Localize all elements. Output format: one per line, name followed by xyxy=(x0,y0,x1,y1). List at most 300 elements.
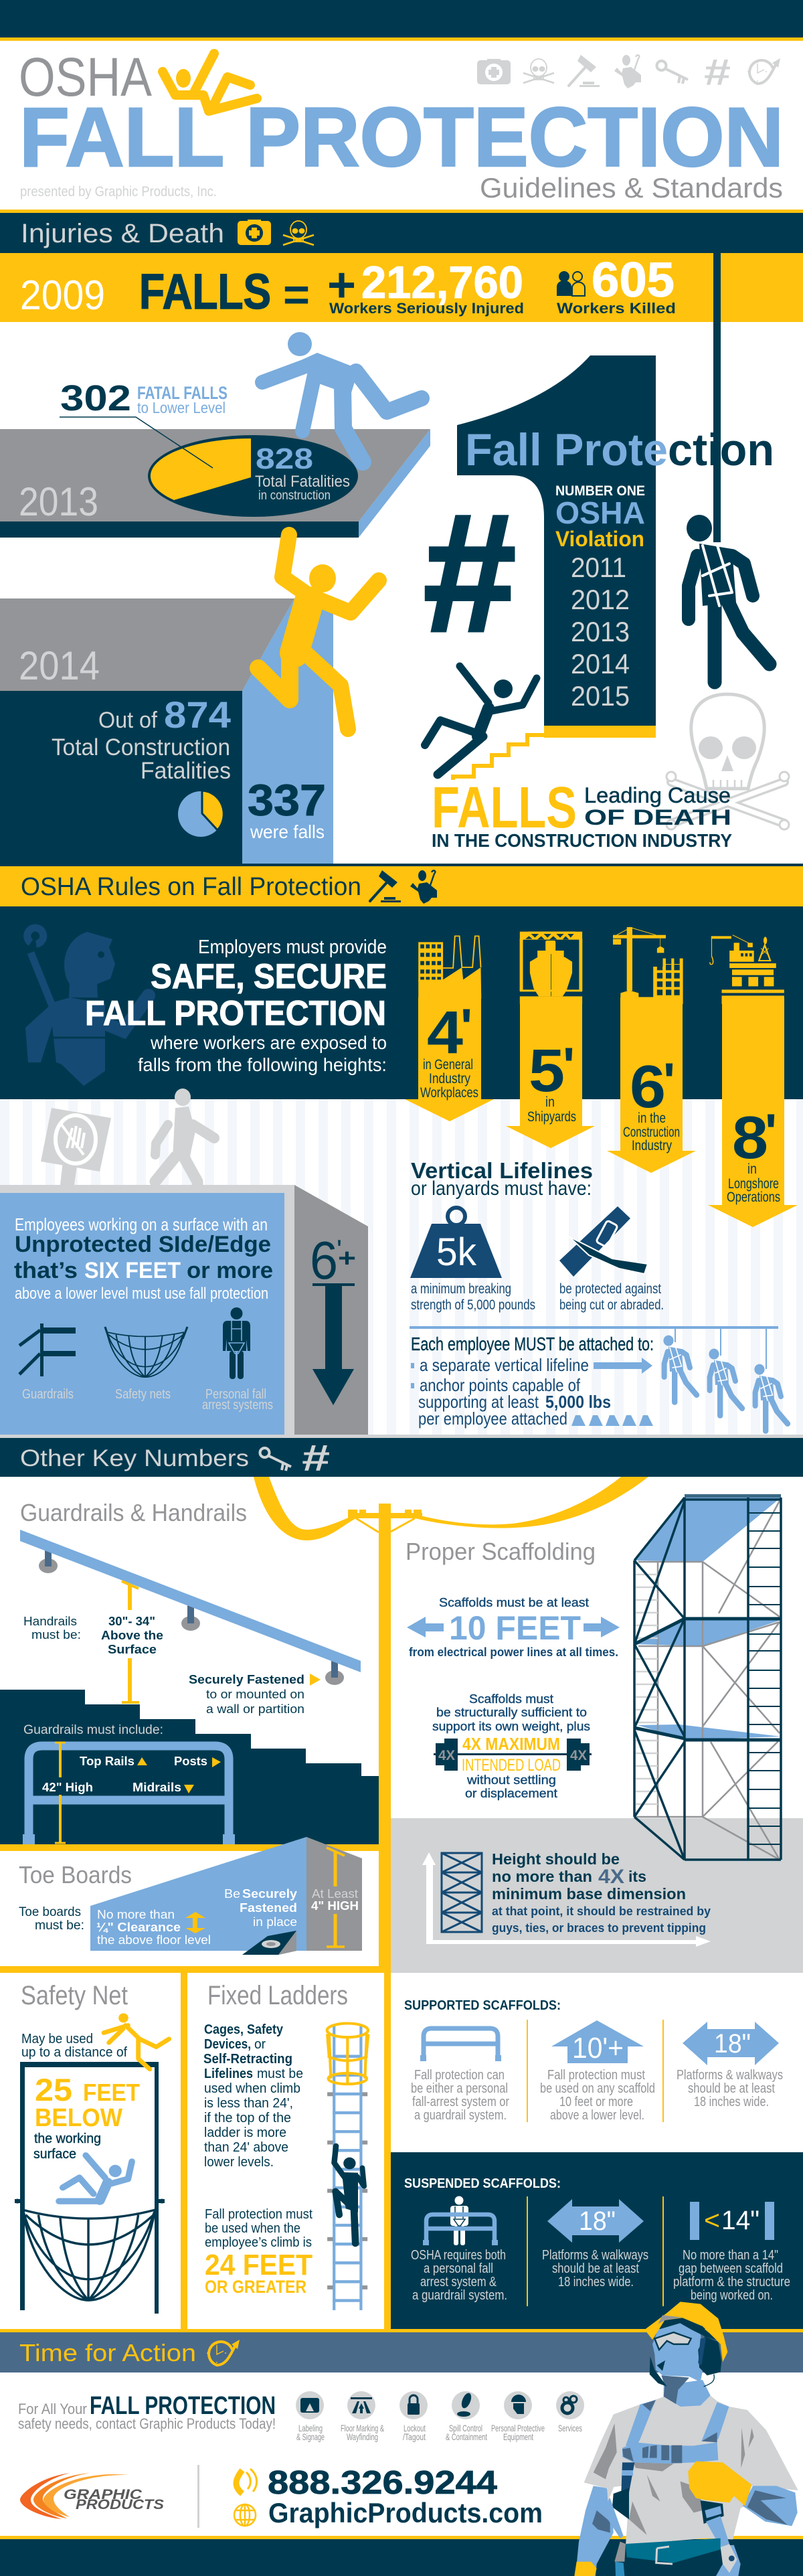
arrows: ten feet xyxy=(407,1617,620,1637)
panel: fixed ladders: Self-Retracting xyxy=(203,2052,292,2067)
diagram: scaffold tower xyxy=(634,1494,781,1860)
arrow: 8 feet longshore: ' xyxy=(765,1104,777,1161)
service icons xyxy=(296,2391,584,2442)
service icons: Floor Marking & xyxy=(341,2423,384,2433)
yellow stairs xyxy=(453,735,544,780)
pie: 828 fatalities xyxy=(148,435,358,517)
top banner xyxy=(0,0,803,41)
panel: vertical lifelines: a minimum breaking xyxy=(411,1281,511,1297)
section heading: Injuries & Death xyxy=(0,213,803,253)
logo: Graphic Products: PRODUCTS xyxy=(76,2497,164,2512)
diagram: ladder xyxy=(327,2023,368,2310)
icon: 18 inch arrow xyxy=(547,2199,644,2243)
panel: suspended scaffolds: being worked on. xyxy=(691,2288,773,2303)
panel: call to action: GraphicProducts.com xyxy=(268,2497,543,2528)
panel: employers must provide: FALL PROTECTION xyxy=(85,994,386,1033)
panel: number one OSHA violation: NUMBER ONE xyxy=(555,483,645,499)
panel: unprotected side edge: above a lower level must use fall protection xyxy=(15,1285,268,1303)
2009 statistics band: + xyxy=(327,258,356,312)
icon: toe board wedge xyxy=(242,1931,296,1955)
silhouette: worker with hook xyxy=(25,928,149,1086)
panel: 2013 ledge: 2013 xyxy=(19,479,98,524)
falls leading cause of death: FALLS xyxy=(432,775,577,840)
logo: Graphic Products: GRAPHIC xyxy=(64,2487,143,2502)
panel: guardrails and handrails: Securely Fastened xyxy=(189,1673,304,1686)
barbell: 4x maximum intended load: 4X xyxy=(438,1748,455,1763)
panel: guardrails and handrails: Posts xyxy=(174,1755,207,1768)
icon: safety net xyxy=(105,1327,187,1377)
panel: vertical lifelines: or lanyards must have: xyxy=(411,1178,592,1200)
year list xyxy=(571,552,630,712)
panel: guardrails and handrails: a wall or partition xyxy=(206,1702,304,1716)
panel: 2014 ledge: were falls xyxy=(250,821,325,842)
panel: unprotected side edge: that’s xyxy=(14,1258,78,1283)
shirt xyxy=(584,2395,798,2545)
panel: toe boards: Be xyxy=(224,1887,240,1901)
lifeline rope xyxy=(713,253,721,542)
panel: guardrails and handrails: 30"- 34" xyxy=(108,1615,155,1628)
panel: toe boards: 4" HIGH xyxy=(311,1899,359,1913)
diagram: sloped handrail xyxy=(20,1530,361,1672)
panel: vertical lifelines: a separate vertical lifeline xyxy=(420,1355,589,1375)
panel: 2013 ledge: 828 xyxy=(256,442,313,475)
chest strap xyxy=(622,2442,718,2464)
panel: unprotected side edge: Personal fall xyxy=(205,1387,266,1402)
panel: guardrails and handrails: Guardrails & Handrails xyxy=(20,1499,247,1526)
panel: unprotected side edge: Guardrails xyxy=(22,1387,74,1402)
panel: toe boards: ¼" Clearance xyxy=(96,1921,181,1934)
panel: number one OSHA violation xyxy=(424,253,789,851)
panel: guardrails and handrails: Midrails xyxy=(132,1781,181,1794)
2009 statistics band: 605 xyxy=(592,253,675,307)
panel: fixed ladders: used when climb xyxy=(204,2081,300,2096)
icon: skull and crossbones xyxy=(666,694,789,829)
panel: fixed ladders: Devices, xyxy=(204,2037,251,2052)
section heading: Time for Action xyxy=(0,2332,803,2372)
arrow: 8 feet longshore: Longshore xyxy=(728,1176,779,1192)
panel: proper scaffolding: no more than xyxy=(492,1868,592,1885)
2009 statistics band: FALLS xyxy=(139,264,271,319)
arrow: 5 feet shipyards: in xyxy=(545,1095,555,1110)
figure: blue worker stepping off xyxy=(262,332,422,462)
panel: employers must provide: falls from the following heights: xyxy=(138,1054,387,1075)
panel: fixed ladders: must be xyxy=(257,2067,303,2081)
icon: 14 inch gap: < xyxy=(704,2206,720,2235)
arrow: 5 feet shipyards xyxy=(506,932,595,1148)
service icons: & Containment xyxy=(446,2431,487,2442)
panel: safety net: up to a distance of xyxy=(21,2045,127,2060)
panel: suspended scaffolds: Platforms & walkways xyxy=(542,2248,648,2263)
arrow: 5 feet shipyards: 5 xyxy=(529,1038,565,1105)
panel: supported scaffolds: Fall protection can xyxy=(414,2068,505,2083)
safety glasses xyxy=(654,2332,691,2350)
callout: 302 fatal falls: to Lower Level xyxy=(137,399,226,416)
height marker 6'+: 6 xyxy=(310,1230,338,1290)
panel: fixed ladders: Lifelines xyxy=(204,2067,253,2081)
arrow: 6 feet construction: Industry xyxy=(632,1138,672,1153)
icon: phone xyxy=(236,2469,257,2494)
head back and earmuff xyxy=(650,2356,667,2387)
year list: 2015 xyxy=(571,680,630,712)
icon: 10 ft up arrow: 10'+ xyxy=(572,2032,624,2065)
header panel xyxy=(0,41,803,210)
panel: proper scaffolding: 4X xyxy=(598,1866,624,1888)
panel: vertical lifelines: be protected against xyxy=(559,1281,661,1297)
panel: vertical lifelines: Each employee MUST be attached to: xyxy=(411,1334,654,1354)
barbell: 4x maximum intended load xyxy=(434,1734,592,1775)
arrow: 6 feet construction xyxy=(607,927,696,1173)
panel: proper scaffolding: guys, ties, or braces to prevent tipping xyxy=(492,1921,706,1935)
panel: lower rules background xyxy=(0,1099,803,1435)
panel: call to action: For All Your xyxy=(18,2401,87,2417)
panel: proper scaffolding: Scaffolds must xyxy=(469,1692,553,1706)
panel: vertical lifelines: per employee attached xyxy=(418,1408,567,1429)
panel: proper scaffolding: its xyxy=(628,1868,646,1885)
panel: suspended scaffolds: a guardrail system. xyxy=(412,2288,507,2303)
icon: 18 inch arrow xyxy=(683,2022,779,2065)
falls leading cause of death xyxy=(432,775,732,851)
panel: employers must provide: SAFE, SECURE xyxy=(151,957,387,996)
icon: people xyxy=(557,271,585,296)
panel: toe boards: Securely xyxy=(242,1887,297,1901)
panel: proper scaffolding: minimum base dimension xyxy=(492,1885,686,1903)
panel: 2014 ledge xyxy=(0,535,379,864)
panel: 2014 ledge: 874 xyxy=(164,694,231,736)
arrow: 6 feet construction: 6 xyxy=(630,1054,666,1121)
diagram: ladder cage xyxy=(327,2023,368,2084)
section heading: Other Key Numbers: Other Key Numbers xyxy=(20,1445,249,1471)
panel: supported scaffolds: be either a personal xyxy=(411,2081,508,2096)
small weights row xyxy=(571,1415,653,1426)
panel: unprotected side edge: or more xyxy=(187,1258,273,1283)
panel: guardrails and handrails: Surface xyxy=(108,1643,157,1656)
diagram: stepped wall xyxy=(0,1690,379,1844)
arrow: 8 feet longshore: Operations xyxy=(727,1190,780,1205)
panel: proper scaffolding: from electrical power lines at all times. xyxy=(409,1645,618,1659)
service icons: Equipment xyxy=(503,2431,533,2442)
arrow: 6 feet construction: ' xyxy=(663,1053,675,1110)
subtitle: Guidelines & Standards xyxy=(480,172,783,204)
panel: fixed ladders: ladder is more xyxy=(204,2125,286,2140)
section heading: OSHA Rules: OSHA Rules on Fall Protection xyxy=(21,873,361,901)
arrow: 8 feet longshore xyxy=(708,935,798,1227)
presenter credit: presented by Graphic Products, Inc. xyxy=(20,184,217,199)
panel: number one OSHA violation: ction xyxy=(668,424,774,475)
icon: 14 inch gap xyxy=(690,2202,774,2240)
figure: yellow worker falling xyxy=(258,535,379,729)
falls leading cause of death: OF DEATH xyxy=(584,805,731,829)
panel: suspended scaffolds: 18 inches wide. xyxy=(558,2275,634,2289)
figure: worker in harness and hard hat xyxy=(574,2302,798,2576)
panel: proper scaffolding: Scaffolds must be at least xyxy=(439,1596,589,1609)
panel: fixed ladders: Fixed Ladders xyxy=(207,1981,348,2010)
figure: blue worker landing xyxy=(59,2156,132,2201)
panel: proper scaffolding: be structurally sufficient to xyxy=(436,1706,587,1719)
panel: fixed ladders: employee’s climb is xyxy=(205,2235,312,2250)
panel: safety net: BELOW xyxy=(35,2104,122,2132)
pie: 337 of 874 xyxy=(178,791,224,837)
arrow: 5 feet shipyards: Shipyards xyxy=(527,1109,576,1125)
panel: suspended scaffolds: gap between scaffold xyxy=(679,2261,783,2276)
figure: climbing worker xyxy=(334,2146,364,2243)
panel: toe boards: Toe Boards xyxy=(19,1861,132,1888)
panel: fixed ladders: 24 FEET xyxy=(205,2249,313,2281)
barbell: 4x maximum intended load: 4X xyxy=(570,1748,587,1763)
icon: guardrail xyxy=(424,2028,498,2059)
arrow: 8 feet longshore: in xyxy=(747,1161,757,1177)
panel: fixed ladders: than 24' above xyxy=(204,2140,288,2155)
panel: safety net: the working xyxy=(34,2131,101,2146)
panel: supported scaffolds: should be at least xyxy=(688,2081,775,2096)
diagram: safety net xyxy=(15,2198,165,2300)
callout: 302 fatal falls: FATAL FALLS xyxy=(137,383,228,403)
height marker 6'+: + xyxy=(338,1244,356,1273)
panel: fixed ladders: Cages, Safety xyxy=(204,2022,284,2037)
panel: number one OSHA violation: OSHA xyxy=(555,495,645,530)
2009 statistics band xyxy=(0,253,803,322)
service icons: & Signage xyxy=(296,2431,325,2442)
panel: call to action: FALL PROTECTION xyxy=(90,2392,276,2420)
panel: proper scaffolding: at that point, it should be restrained by xyxy=(492,1905,711,1918)
icon: 14 inch gap: 14" xyxy=(721,2206,760,2235)
panel: call to action: 888.326.9244 xyxy=(268,2465,497,2501)
panel: suspended scaffolds xyxy=(391,2152,803,2329)
panel: supported scaffolds: above a lower level. xyxy=(550,2108,644,2123)
callout: 302 fatal falls xyxy=(60,378,228,468)
panel: unprotected side edge: arrest systems xyxy=(202,1398,273,1413)
panel: employers must provide: Employers must provide xyxy=(198,937,387,958)
belt xyxy=(626,2539,721,2563)
panel: fixed ladders: or xyxy=(254,2037,266,2052)
2009 statistics band: Workers Killed xyxy=(557,300,676,317)
icon: falling worker xyxy=(163,54,257,111)
panel: fixed ladders xyxy=(203,1981,368,2310)
panel: toe boards: Fastened xyxy=(240,1901,297,1915)
panel: vertical lifelines: anchor points capable of xyxy=(420,1375,581,1395)
panel: fixed ladders: if the top of the xyxy=(204,2111,291,2125)
panel: employers must provide: where workers are exposed to xyxy=(150,1032,387,1053)
panel: 2013 ledge: in construction xyxy=(258,489,331,503)
panel: supported scaffolds: 18 inches wide. xyxy=(694,2095,769,2109)
panel: guardrails and handrails: must be: xyxy=(31,1628,81,1641)
panel: vertical lifelines: supporting at least xyxy=(418,1392,539,1412)
year list: 2014 xyxy=(571,648,630,679)
panel: suspended scaffolds: SUSPENDED SCAFFOLDS: xyxy=(404,2176,561,2191)
arrow: 4 feet general industry: ' xyxy=(460,999,472,1056)
panel: guardrails and handrails: Above the xyxy=(101,1629,163,1642)
2009 statistics band: Workers Seriously Injured xyxy=(329,300,524,317)
panel: suspended scaffolds: No more than a 14" xyxy=(683,2248,778,2263)
panel: call to action xyxy=(0,2372,803,2576)
panel: guardrails and handrails: Handrails xyxy=(23,1615,77,1628)
panel: 2013 ledge: Total Fatalities xyxy=(255,473,350,491)
hash symbol: # xyxy=(424,479,516,666)
panel: safety net xyxy=(15,1981,169,2314)
panel: employers must provide xyxy=(0,906,803,1099)
section heading: Time for Action: Time for Action xyxy=(19,2339,196,2366)
topic icons xyxy=(477,51,780,93)
panel: supported scaffolds: Fall protection must xyxy=(547,2068,645,2083)
panel: supported scaffolds: be used on any scaffold xyxy=(540,2081,655,2096)
shirt shadows xyxy=(594,2423,754,2535)
panel: fixed ladders: be used when the xyxy=(205,2221,300,2236)
panel: supported scaffolds: a guardrail system. xyxy=(414,2108,507,2123)
panel: guardrails and handrails xyxy=(0,1499,379,1851)
panel: number one OSHA violation: Violation xyxy=(555,527,644,551)
dimension: handrail height xyxy=(122,1581,139,1702)
panel: suspended scaffolds: should be at least xyxy=(552,2261,639,2276)
panel: toe boards xyxy=(0,1837,379,1966)
service icons: Labeling xyxy=(298,2423,323,2433)
panel: fixed ladders: OR GREATER xyxy=(205,2277,306,2297)
service icons: /Tagout xyxy=(403,2431,426,2442)
panel: fixed ladders: is less than 24', xyxy=(204,2096,293,2111)
icon: clearance arrows xyxy=(185,1912,205,1933)
panel: toe boards: At Least xyxy=(312,1887,358,1901)
panel: proper scaffolding: without settling xyxy=(466,1773,556,1787)
panel: proper scaffolding: Height should be xyxy=(492,1850,620,1868)
figure: worker in harness xyxy=(687,515,770,682)
figure: walking worker xyxy=(155,1089,214,1188)
panel: guardrails and handrails: 42" High xyxy=(42,1781,93,1794)
falls leading cause of death: Leading Cause xyxy=(584,783,731,807)
panel: proper scaffolding xyxy=(391,1494,803,1973)
panel: unprotected side edge: Unprotected SIde/Edge xyxy=(15,1232,271,1257)
section heading: Injuries & Death: Injuries & Death xyxy=(21,219,224,248)
panel: toe boards: in place xyxy=(253,1915,297,1929)
panel: fixed ladders: lower levels. xyxy=(204,2155,274,2170)
glove xyxy=(688,2462,751,2506)
panel: 2014 ledge: 2014 xyxy=(19,643,100,688)
title: FALL PROTECTION: FALL PROTECTION xyxy=(19,91,784,184)
arrow: 8 feet longshore: 8 xyxy=(732,1105,768,1172)
panel: supported scaffolds xyxy=(404,1998,783,2123)
panel: unprotected side edge: Safety nets xyxy=(115,1387,171,1402)
panel: vertical lifelines: 5,000 lbs xyxy=(545,1392,611,1412)
panel: guardrails and handrails: Top Rails xyxy=(80,1755,135,1768)
icon: stop sign xyxy=(41,1108,111,1185)
panel: toe boards: the above floor level xyxy=(97,1933,211,1947)
diagram: net frame xyxy=(20,2062,159,2314)
section heading: Other Key Numbers xyxy=(0,1435,803,1479)
arrow: 6 feet construction: Construction xyxy=(623,1125,680,1140)
icon: globe xyxy=(234,2504,256,2526)
arrow: 4 feet general industry: 4 xyxy=(427,999,463,1066)
2009 statistics band: = xyxy=(283,269,310,320)
arrow: 5 feet shipyards: ' xyxy=(563,1038,575,1095)
section heading: OSHA Rules xyxy=(0,864,803,906)
panel: proper scaffolding: 10 FEET xyxy=(449,1609,581,1647)
panel: 2014 ledge: Fatalities xyxy=(141,758,231,784)
panel: vertical lifelines: Vertical Lifelines xyxy=(411,1158,593,1183)
panel: unprotected side edge: Employees working on a surface with an xyxy=(15,1214,268,1234)
arm left xyxy=(575,2486,614,2576)
panel: supported scaffolds: fall-arrest system or xyxy=(412,2095,509,2109)
utility pole and power line xyxy=(254,1477,648,1966)
panel: safety net: FEET xyxy=(83,2079,140,2106)
hard hat xyxy=(661,2318,718,2341)
arrow: 4 feet general industry xyxy=(405,936,494,1121)
panel: toe boards: Toe boards xyxy=(19,1905,81,1919)
straps xyxy=(626,2400,656,2448)
panel: toe boards: must be: xyxy=(35,1919,84,1933)
divider frame xyxy=(0,1966,803,2332)
panel: vertical lifelines: strength of 5,000 pounds xyxy=(411,1297,535,1313)
panel: safety net: Safety Net xyxy=(21,1981,128,2010)
face xyxy=(652,2322,704,2382)
service icons: Services xyxy=(558,2423,582,2433)
year list: 2013 xyxy=(571,616,630,647)
section heading: Other Key Numbers: # xyxy=(301,1437,330,1479)
figure: navy worker tumbling on stairs xyxy=(425,666,537,775)
panel: toe boards: No more than xyxy=(97,1908,175,1921)
panel: 2014 ledge: Out of xyxy=(98,708,158,733)
figure: yellow worker jumping xyxy=(104,2013,169,2069)
icon: 10 ft up arrow xyxy=(551,2020,644,2065)
panel: fixed ladders: Fall protection must xyxy=(205,2207,313,2222)
forearm right xyxy=(743,2486,798,2526)
barbell: 4x maximum intended load: 4X MAXIMUM xyxy=(462,1734,560,1754)
icon: 5k weight: 5k xyxy=(436,1230,477,1274)
icon: harness worker behind guardrail xyxy=(423,2196,498,2245)
panel: suspended scaffolds: OSHA requires both xyxy=(411,2248,506,2263)
diagram: brackets xyxy=(39,1550,344,1685)
panel: unprotected side edge xyxy=(0,1089,368,1435)
panel: 2014 ledge: 337 xyxy=(248,775,326,825)
panel: 2013 ledge xyxy=(0,332,430,538)
harness lower xyxy=(621,2462,634,2492)
heading: Fall Protection: Fall Prote xyxy=(465,424,668,475)
arrow: 4 feet general industry: Industry xyxy=(429,1071,470,1086)
icon: 5k weight xyxy=(410,1208,502,1278)
year list: 2011 xyxy=(571,552,626,583)
panel: vertical lifelines xyxy=(410,1158,788,1431)
icon: strap and knife xyxy=(559,1206,648,1277)
panel: proper scaffolding: Proper Scaffolding xyxy=(406,1538,596,1565)
panel: safety net: 25 xyxy=(35,2072,72,2107)
panel: guardrails and handrails: Guardrails must include: xyxy=(23,1723,163,1737)
logo: Graphic Products xyxy=(20,2473,164,2519)
panel: proper scaffolding: support its own weight, plus xyxy=(432,1720,590,1733)
height marker 6'+: ' xyxy=(337,1235,342,1265)
panel: suspended scaffolds: arrest system & xyxy=(420,2275,497,2289)
arrow: 4 feet general industry: in General xyxy=(423,1057,473,1072)
panel: 2014 ledge: Total Construction xyxy=(52,734,230,760)
barbell: 4x maximum intended load: INTENDED LOAD xyxy=(462,1756,561,1775)
arrow: 6 feet construction: in the xyxy=(638,1111,666,1126)
arrow: 4 feet general industry: Workplaces xyxy=(420,1085,478,1101)
anchor rail with hanging workers xyxy=(410,1326,788,1431)
2009 statistics band: 212,760 xyxy=(361,257,523,308)
icon: 18 inch arrow: 18" xyxy=(579,2206,616,2236)
panel: supported scaffolds: SUPPORTED SCAFFOLDS: xyxy=(404,1998,561,2013)
panel: guardrails and handrails: to or mounted on xyxy=(206,1688,304,1701)
panel: unprotected side edge: SIX FEET xyxy=(84,1258,181,1283)
service icons: Spill Control xyxy=(449,2423,482,2433)
topic icons: # xyxy=(704,51,731,93)
panel: call to action: safety needs, contact Graphic Products Today! xyxy=(18,2415,276,2432)
service icons: Personal Protective xyxy=(491,2423,545,2433)
callout: 302 fatal falls: 302 xyxy=(60,378,131,418)
panel: supported scaffolds: 10 feet or more xyxy=(559,2095,633,2109)
icon: guardrails xyxy=(19,1323,76,1376)
year list: 2012 xyxy=(571,584,630,615)
arrow: to lifeline xyxy=(594,1358,652,1374)
height marker 6'+ xyxy=(310,1230,356,1405)
falls leading cause of death: IN THE CONSTRUCTION INDUSTRY xyxy=(432,830,732,851)
diagram: guardrail xyxy=(29,1746,229,1844)
panel: vertical lifelines: being cut or abraded. xyxy=(559,1297,664,1313)
